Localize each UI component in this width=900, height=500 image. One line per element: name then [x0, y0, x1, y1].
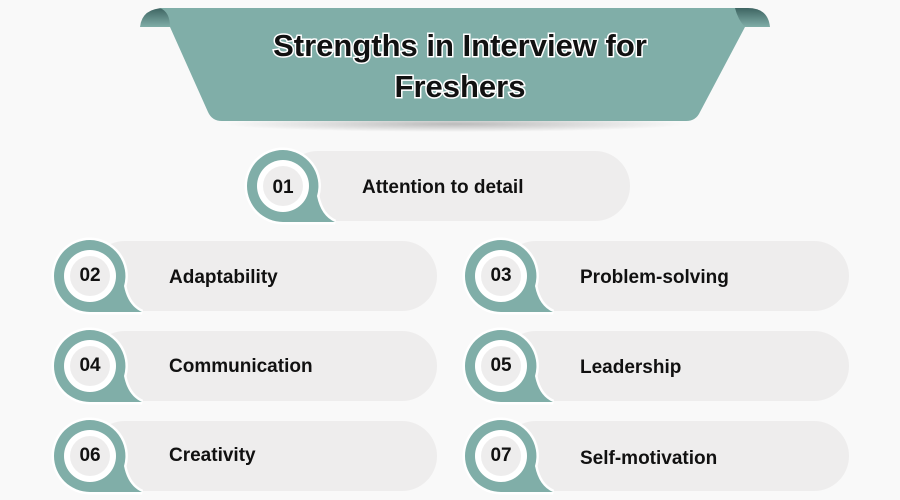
item 04: Communication	[169, 356, 313, 377]
item 04	[54, 330, 437, 402]
item 04: 04	[79, 355, 101, 376]
item 03	[465, 240, 849, 312]
item 03: Problem-solving	[580, 267, 729, 288]
item 05	[465, 330, 849, 402]
item 07	[465, 420, 849, 492]
title banner: Freshers	[395, 69, 525, 104]
item 06	[54, 420, 437, 492]
item 02: Adaptability	[169, 267, 278, 288]
item 01: 01	[272, 177, 294, 198]
item 07: 07	[490, 445, 512, 466]
item 07: Self-motivation	[580, 448, 717, 469]
title banner	[140, 8, 770, 132]
item 01	[247, 150, 630, 222]
item 01: Attention to detail	[362, 177, 523, 198]
item 03: 03	[490, 265, 512, 286]
item 05: 05	[490, 355, 512, 376]
item 02: 02	[79, 265, 101, 286]
item 06: 06	[79, 445, 101, 466]
item 05: Leadership	[580, 357, 681, 378]
title text: Strengths in Interview for	[273, 28, 647, 63]
item 02	[54, 240, 437, 312]
item 06: Creativity	[169, 445, 256, 466]
